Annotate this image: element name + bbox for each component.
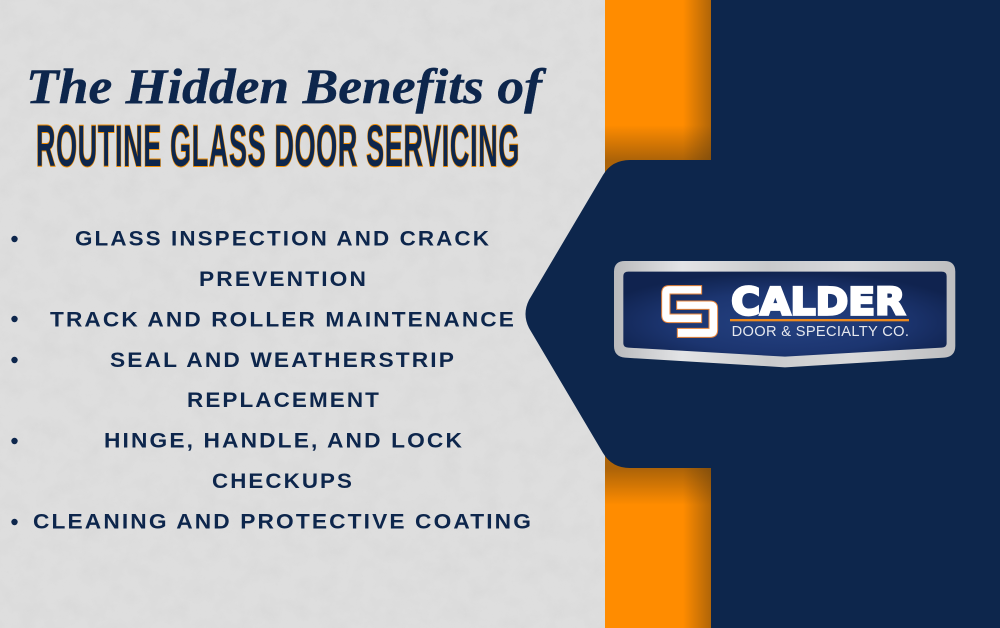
orange rule: [730, 319, 909, 321]
list item: track and roller: TRACK AND ROLLER MAINTENANCE: [50, 307, 516, 331]
list item: seal and weatherstrip: REPLACEMENT: [187, 388, 381, 412]
logo: Calder Door & Specialty Co. badge: [614, 261, 955, 367]
panel: navy arrow block: [526, 0, 1000, 628]
panel: concrete background: [0, 0, 606, 628]
list item: seal and weatherstrip: [11, 348, 456, 412]
logo mark: [662, 286, 718, 337]
list item: hinge, handle, lock: HINGE, HANDLE, AND LOCK: [104, 429, 464, 453]
badge blue field: [623, 272, 947, 357]
panel: orange band: [605, 0, 711, 628]
list item: glass inspection: [11, 226, 491, 291]
wordmark: CALDER: [731, 280, 905, 324]
list item: hinge, handle, lock: [11, 429, 464, 493]
list item: hinge, handle, lock: CHECKUPS: [212, 469, 354, 493]
tagline: DOOR & SPECIALTY CO.: [732, 323, 909, 340]
list item: glass inspection: PREVENTION: [199, 267, 368, 291]
bullet list of services: [11, 226, 533, 534]
list item: cleaning and coating: CLEANING AND PROTECTIVE COATING: [33, 510, 533, 534]
badge steel frame: [614, 261, 955, 367]
list item: seal and weatherstrip: SEAL AND WEATHERSTRIP: [110, 348, 456, 372]
title: The Hidden Benefits of: The Hidden Benefits of: [26, 58, 547, 114]
list item: glass inspection: GLASS INSPECTION AND CRACK: [75, 226, 491, 250]
